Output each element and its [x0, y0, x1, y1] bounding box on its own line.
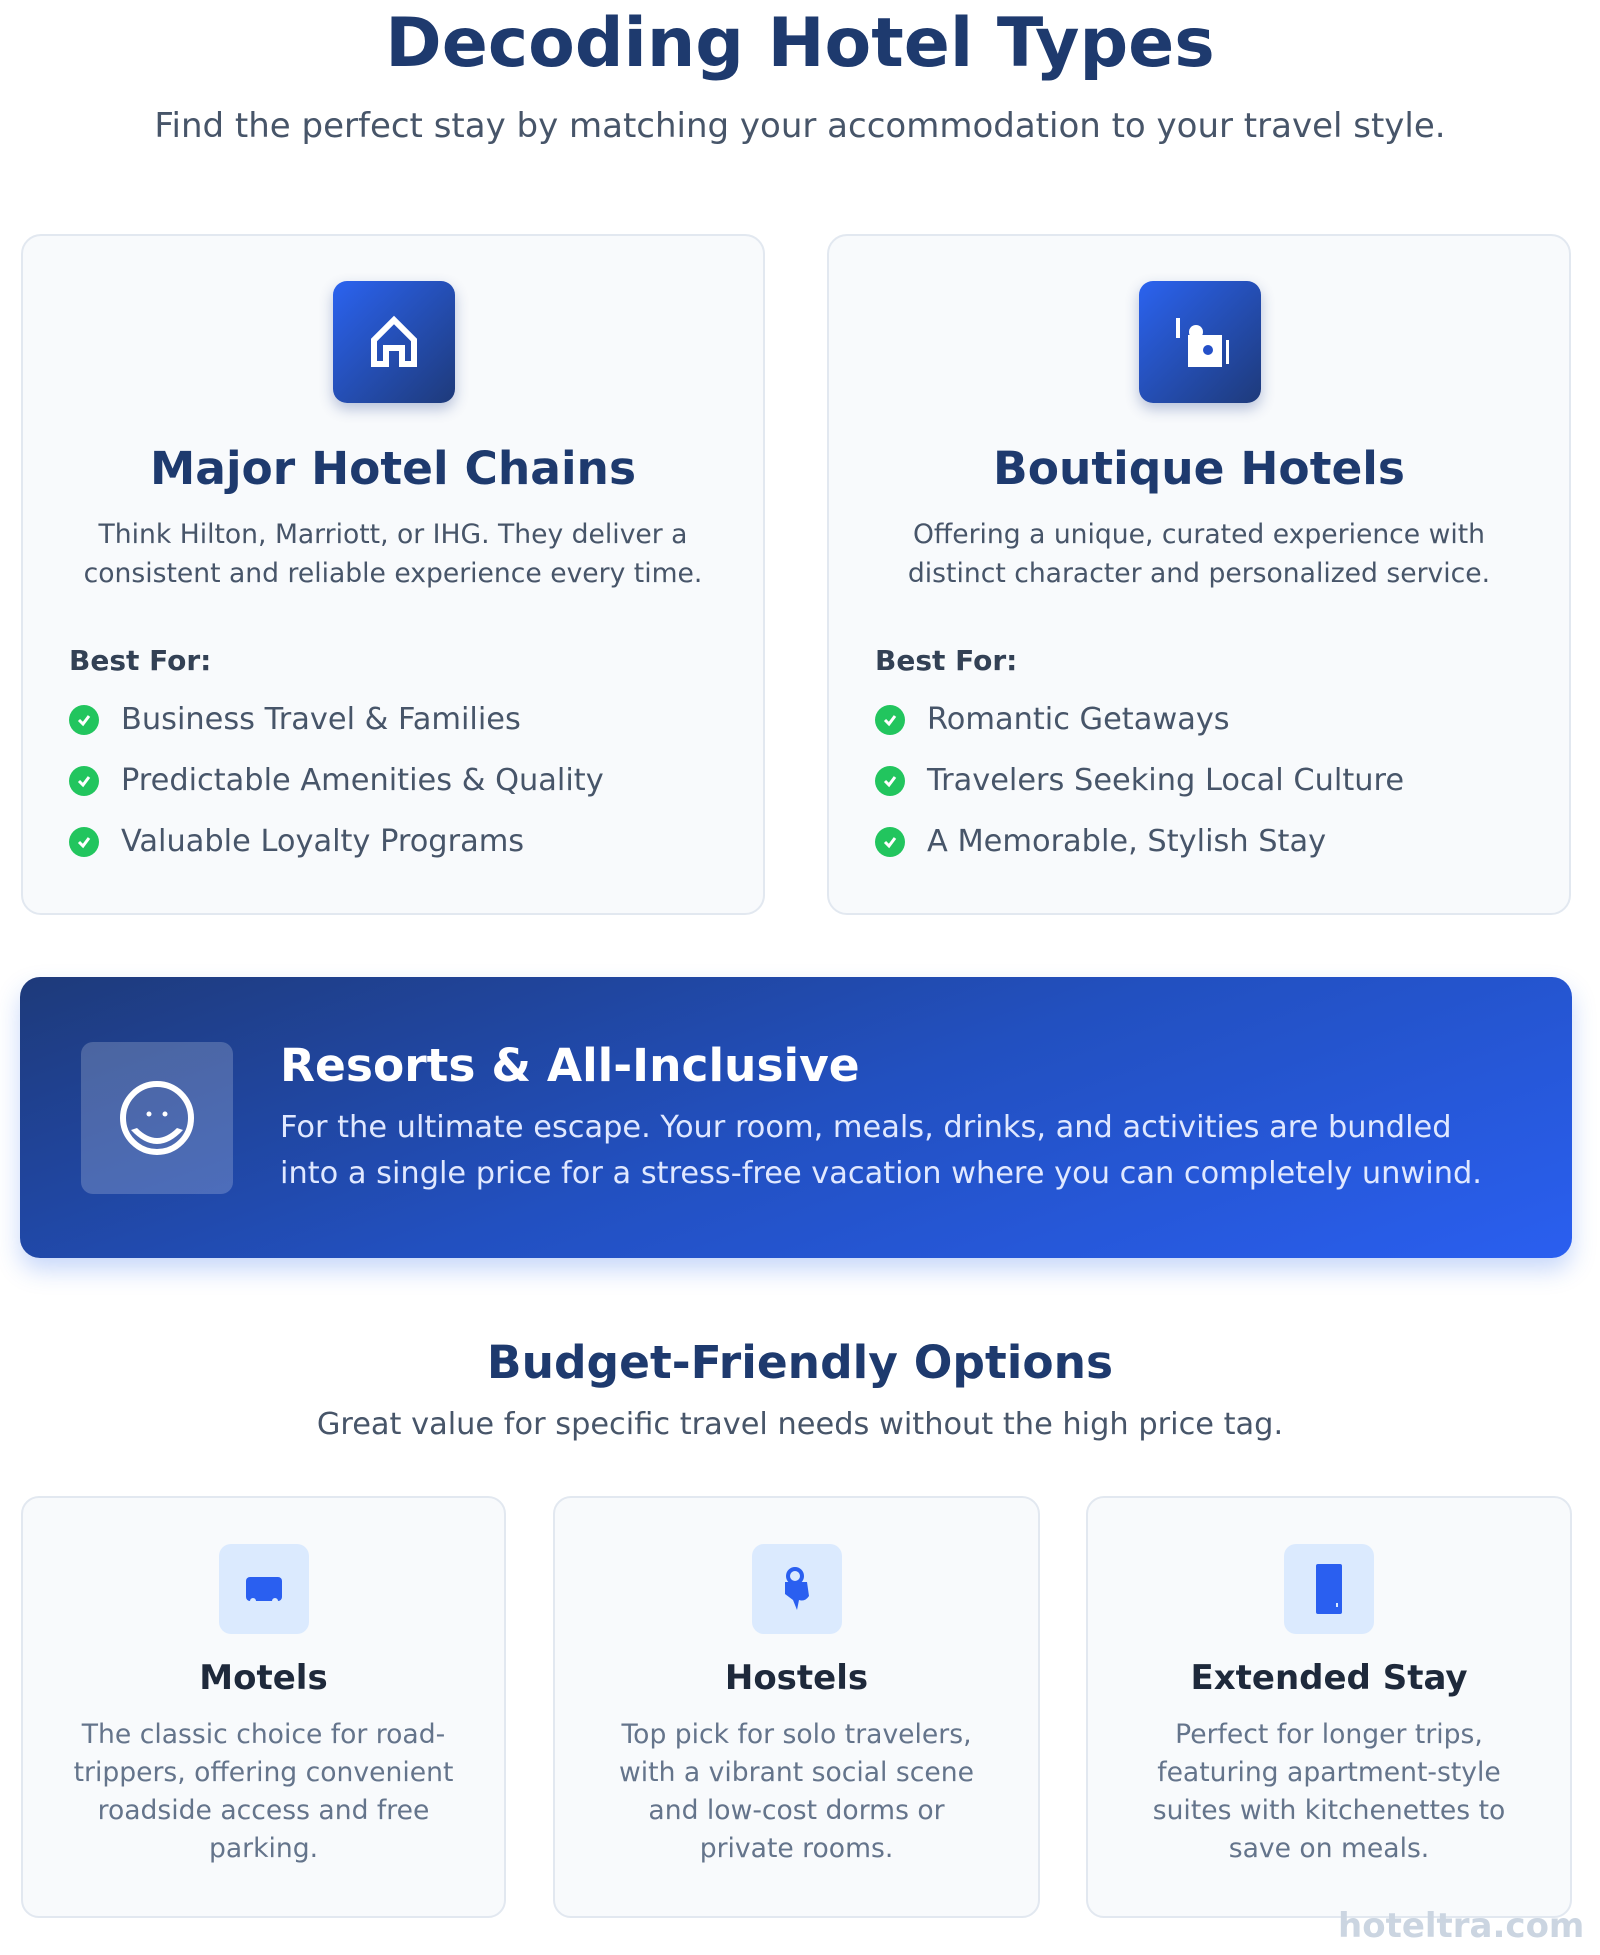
icon: backpack: [752, 1544, 842, 1634]
list: Romantic Getaways: [927, 702, 1230, 737]
description: featuring apartment-style: [1157, 1757, 1501, 1788]
description: [908, 519, 1490, 589]
list: Valuable Loyalty Programs: [121, 824, 524, 859]
description: and low-cost dorms or: [648, 1795, 945, 1826]
title: Decoding Hotel Types: [385, 4, 1215, 83]
panel: major hotel chains: [21, 234, 765, 915]
description: suites with kitchenettes to: [1153, 1795, 1505, 1826]
description: [74, 1719, 453, 1864]
panel: motels: [21, 1496, 506, 1918]
panel: extended stay: [1086, 1496, 1572, 1918]
description: Offering a unique, curated experience with: [913, 519, 1485, 550]
budget subtitle: Great value for specific travel needs without the high price tag.: [317, 1407, 1283, 1442]
description: into a single price for a stress-free vacation where you can completely unwind.: [280, 1156, 1482, 1191]
description: with a vibrant social scene: [619, 1757, 974, 1788]
heading: Boutique Hotels: [993, 442, 1405, 495]
description: Think Hilton, Marriott, or IHG. They deliver a: [99, 519, 687, 550]
heading: Major Hotel Chains: [150, 442, 636, 495]
description: roadside access and free: [98, 1795, 429, 1826]
description: Top pick for solo travelers,: [621, 1719, 972, 1750]
description: [1153, 1719, 1505, 1864]
panel: boutique hotels: [827, 234, 1571, 915]
list: [69, 702, 604, 859]
watermark: hoteltra.com: [1338, 1906, 1584, 1946]
panel: hostels: [553, 1496, 1040, 1918]
icon: resort: [81, 1042, 233, 1194]
subtitle: Find the perfect stay by matching your accommodation to your travel style.: [154, 106, 1446, 146]
description: private rooms.: [700, 1833, 893, 1864]
list: Predictable Amenities & Quality: [121, 763, 604, 798]
description: The classic choice for road-: [82, 1719, 445, 1750]
icon: car: [218, 1544, 308, 1634]
list: Business Travel & Families: [121, 702, 521, 737]
description: Perfect for longer trips,: [1175, 1719, 1483, 1750]
list: Travelers Seeking Local Culture: [927, 763, 1404, 798]
heading: Extended Stay: [1190, 1658, 1468, 1698]
icon: boutique: [1139, 281, 1261, 403]
best for label: Best For:: [875, 644, 1017, 677]
icon: door: [1284, 1544, 1374, 1634]
description: distinct character and personalized service.: [908, 558, 1490, 589]
description: [84, 519, 702, 589]
description: parking.: [209, 1833, 318, 1864]
description: For the ultimate escape. Your room, meals, drinks, and activities are bundled: [280, 1110, 1452, 1145]
heading: Hostels: [725, 1658, 868, 1698]
description: [280, 1110, 1482, 1191]
panel: resorts banner: [20, 977, 1572, 1258]
list: A Memorable, Stylish Stay: [927, 824, 1326, 859]
icon: house: [333, 281, 455, 403]
description: consistent and reliable experience every time.: [84, 558, 702, 589]
budget heading: Budget-Friendly Options: [487, 1336, 1113, 1389]
description: save on meals.: [1229, 1833, 1429, 1864]
heading: Motels: [199, 1658, 328, 1698]
best for label: Best For:: [69, 644, 211, 677]
heading: Resorts & All-Inclusive: [280, 1039, 860, 1092]
list: [875, 702, 1404, 859]
description: [619, 1719, 974, 1864]
description: trippers, offering convenient: [74, 1757, 453, 1788]
